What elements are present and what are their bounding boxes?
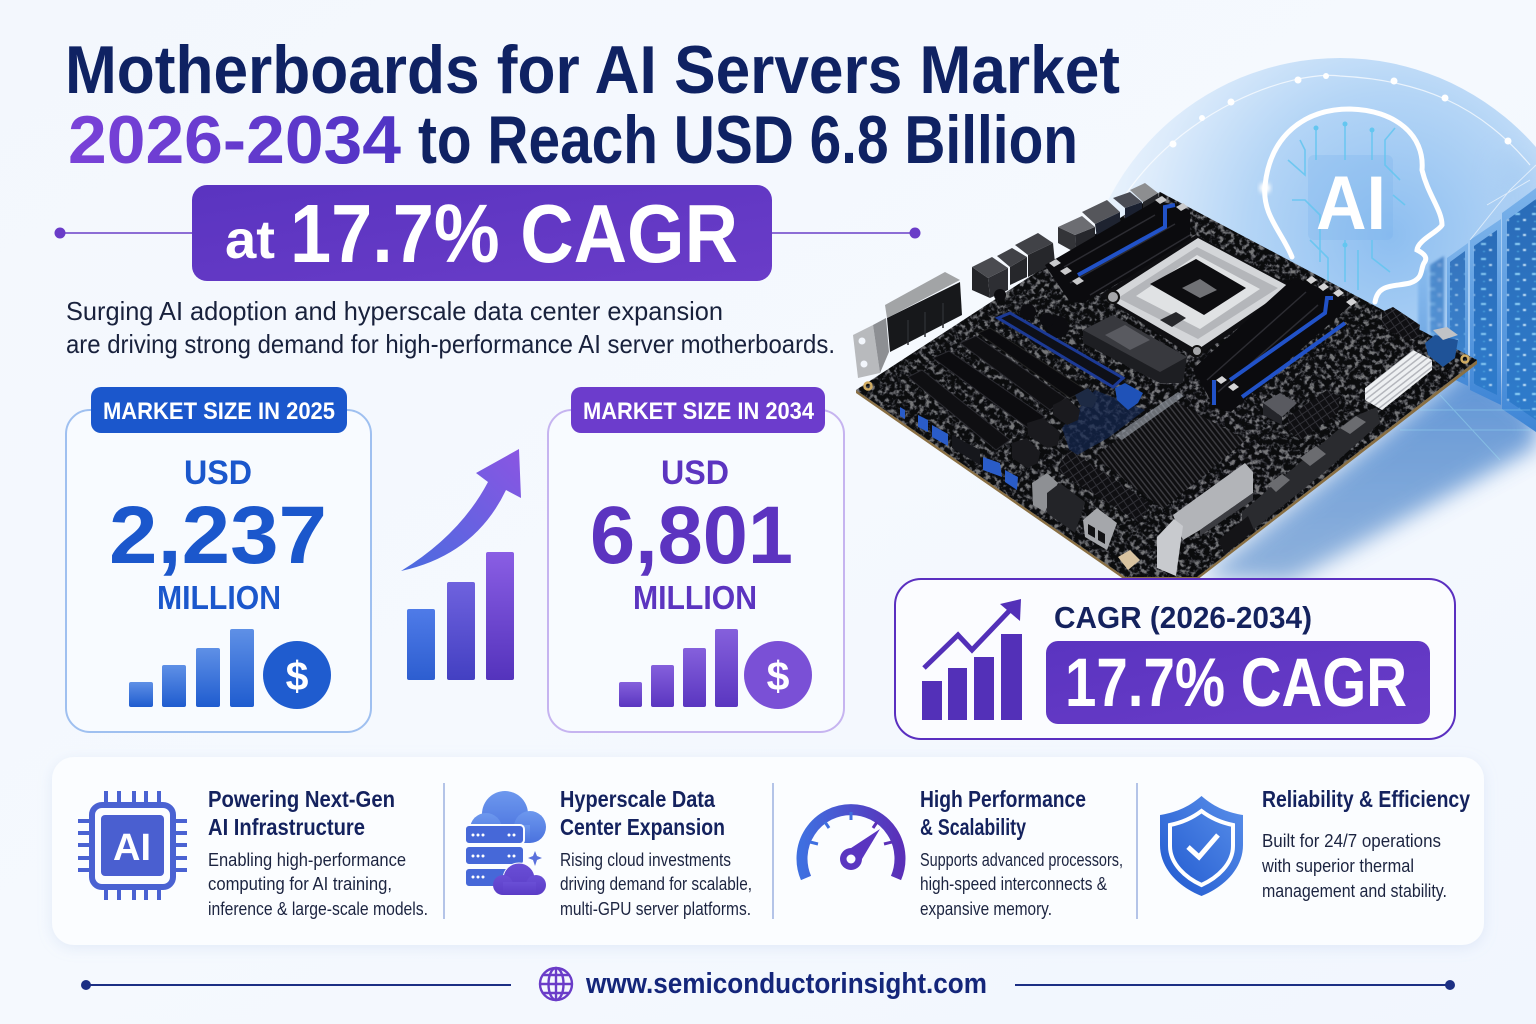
upper memory slots: [1045, 196, 1190, 303]
driver: reliability text: management and stability.: [1262, 881, 1447, 901]
driver: reliability text: [1261, 786, 1470, 901]
CPU socket: [1100, 235, 1296, 358]
CAGR headline pill: 17.7% CAGR: [290, 187, 738, 280]
title: to Reach USD 6.8 Billion: [418, 102, 1078, 178]
icon: globe: [540, 968, 572, 1000]
value 2034: 6,801: [590, 490, 793, 581]
driver: hyperscale text: driving demand for scalable,: [560, 874, 752, 894]
blue floor shadow: [1200, 360, 1536, 582]
rear bracket and connectors: [853, 183, 1158, 378]
value 2025: USD: [184, 454, 252, 492]
subtitle: [66, 296, 835, 359]
driver: AI infrastructure text: computing for AI training,: [208, 874, 392, 894]
driver: AI infrastructure text: [208, 786, 428, 919]
front IO ports: [900, 407, 1140, 570]
icon: AI chip: [78, 791, 187, 900]
header badge 2025: [91, 387, 347, 433]
value 2034: MILLION: [633, 579, 757, 616]
icon: bars and dollar 2034: [619, 629, 812, 709]
board base: [856, 360, 1477, 580]
lower memory slots: [1193, 276, 1357, 412]
CAGR headline pill: [54, 185, 920, 281]
illustration: AI head, data center and motherboard: [850, 58, 1536, 582]
value 2025: 2,237: [109, 490, 327, 581]
driver: AI infrastructure text: AI Infrastructure: [208, 814, 365, 840]
white connector: [1365, 350, 1432, 410]
title: [65, 32, 1120, 178]
title: 2026-2034: [68, 102, 401, 178]
icon: bars and dollar 2025: $: [286, 653, 309, 699]
footer: [81, 968, 1455, 1000]
driver: hyperscale text: [560, 786, 752, 919]
glowing dome: [1095, 58, 1536, 407]
PCIe slots: [908, 313, 1143, 468]
header badge 2025: MARKET SIZE IN 2025: [103, 398, 335, 425]
icon: cloud servers: [465, 791, 546, 895]
driver: performance text: [920, 786, 1123, 919]
subtitle: are driving strong demand for high-performance AI server motherboards.: [66, 329, 835, 359]
circuit arc with nodes: [1122, 73, 1536, 240]
driver: AI infrastructure text: inference & large-scale models.: [208, 899, 428, 919]
panel: key drivers: [52, 757, 1484, 945]
driver: performance text: expansive memory.: [920, 899, 1052, 919]
header badge 2034: [571, 387, 825, 433]
driver: performance text: high-speed interconnects &: [920, 874, 1107, 894]
header badge 2034: MARKET SIZE IN 2034: [583, 398, 815, 425]
capacitors: [994, 289, 1069, 338]
driver: AI infrastructure text: Powering Next-Gen: [208, 786, 395, 812]
icon: growth chart: [922, 599, 1022, 720]
icon: bars and dollar 2025: [129, 629, 331, 709]
server racks: [1400, 188, 1536, 460]
grey chip: [1083, 315, 1187, 383]
AI head outline: [1260, 109, 1442, 302]
mounting holes: [864, 356, 1468, 390]
motherboard: [850, 180, 1480, 580]
icon: bars and dollar 2034: $: [767, 653, 790, 699]
driver: AI infrastructure text: Enabling high-performance: [208, 850, 406, 870]
icon: gauge: [802, 810, 900, 878]
value 2025: [109, 454, 327, 616]
silver bracket: [1157, 463, 1253, 576]
website: www.semiconductorinsight.com: [585, 968, 987, 1000]
value 2034: USD: [661, 454, 729, 492]
chipset heatsink: [1060, 392, 1246, 523]
driver: performance text: & Scalability: [920, 814, 1026, 840]
driver: performance text: Supports advanced processors,: [920, 850, 1123, 870]
panel: CAGR: [895, 579, 1455, 739]
driver: reliability text: with superior thermal: [1261, 856, 1414, 876]
CAGR headline pill: at: [225, 210, 275, 270]
CAGR label: CAGR (2026-2034): [1054, 600, 1312, 635]
CAGR value pill: 17.7% CAGR: [1065, 644, 1407, 721]
driver: hyperscale text: multi-GPU server platforms.: [560, 899, 751, 919]
panel: market size 2034: [548, 387, 844, 732]
panel: market size 2025: [66, 387, 371, 732]
growth arrow and bars: [401, 449, 521, 680]
value 2025: MILLION: [157, 579, 281, 616]
power and side connectors: [1218, 307, 1458, 555]
AI head outline: AI: [1316, 161, 1386, 246]
driver: reliability text: Built for 24/7 operations: [1262, 831, 1441, 851]
icon: AI chip: AI: [113, 827, 151, 869]
driver: hyperscale text: Center Expansion: [560, 814, 725, 840]
subtitle: Surging AI adoption and hyperscale data center expansion: [66, 296, 723, 326]
driver: reliability text: Reliability & Efficiency: [1262, 786, 1470, 812]
title: Motherboards for AI Servers Market: [65, 32, 1120, 108]
driver: hyperscale text: Rising cloud investments: [560, 850, 731, 870]
driver: performance text: High Performance: [920, 786, 1086, 812]
driver: hyperscale text: Hyperscale Data: [560, 786, 715, 812]
value 2034: [590, 454, 793, 616]
icon: shield check: [1160, 796, 1243, 896]
